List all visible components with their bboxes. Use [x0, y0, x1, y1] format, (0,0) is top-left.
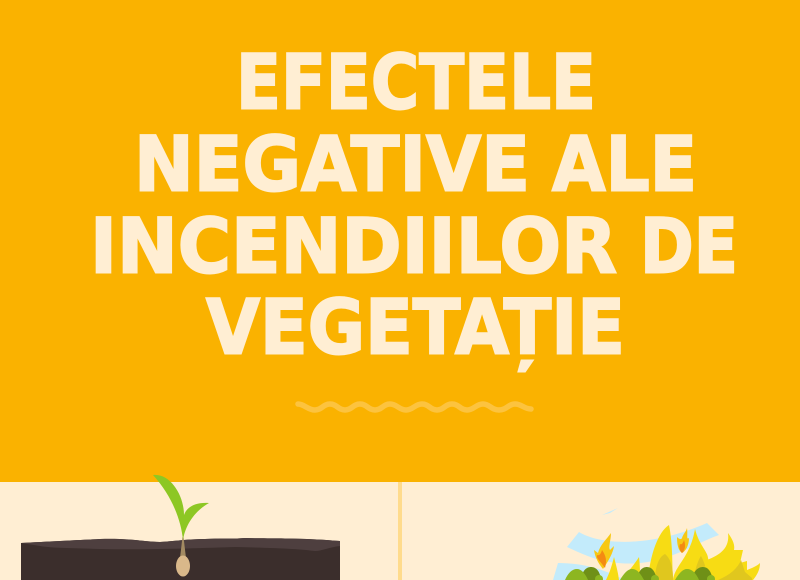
divider between panels — [398, 482, 402, 580]
icon: bushes — [565, 567, 715, 580]
icon: soil — [21, 538, 340, 580]
title: INCENDIILOR — [90, 202, 617, 290]
title: EFECTELE — [236, 38, 596, 126]
title: ALE — [552, 120, 697, 208]
icon: sprout — [153, 475, 209, 576]
icon: floating flame left — [594, 533, 614, 569]
title — [90, 38, 738, 372]
wavy underline — [298, 404, 531, 410]
icon: smoke bands — [553, 508, 719, 580]
panel: left soil panel — [0, 482, 398, 580]
title: DE — [640, 202, 738, 290]
panel: right fire panel — [402, 482, 800, 580]
icon: flames — [606, 525, 760, 580]
title: NEGATIVE — [134, 120, 530, 208]
title: VEGETAȚIE — [206, 282, 625, 372]
icon: floating flame right — [677, 528, 689, 553]
